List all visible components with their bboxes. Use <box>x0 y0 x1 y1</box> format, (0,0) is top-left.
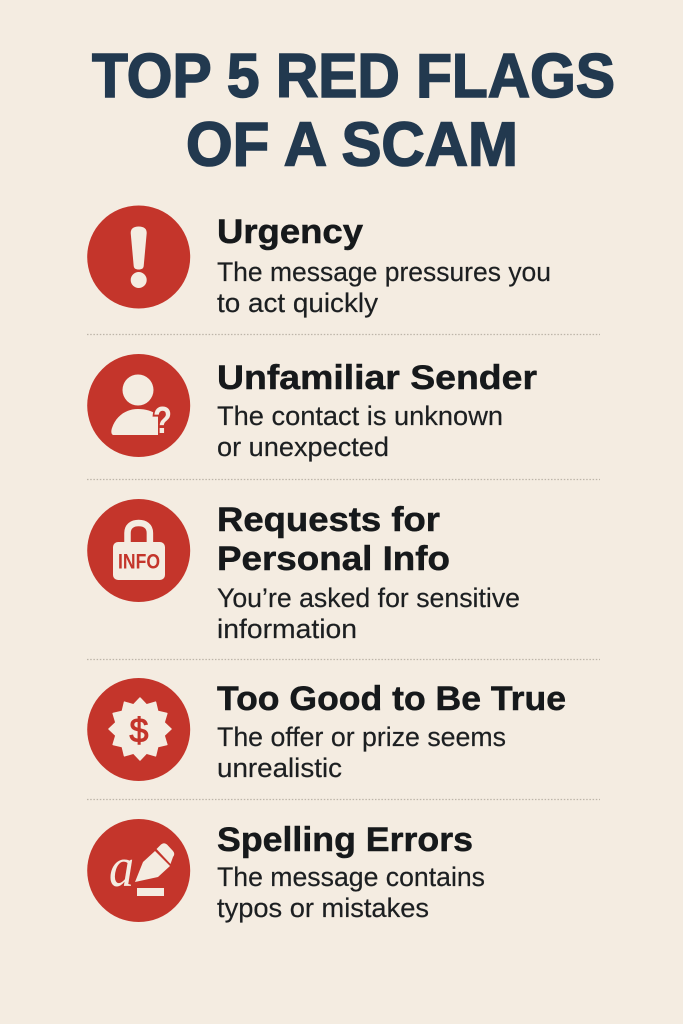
icon: person with question mark <box>87 354 190 457</box>
text: too good to be true: The offer or prize seems <box>217 722 506 752</box>
item: spelling errors <box>87 819 485 923</box>
title: TOP 5 RED FLAGS <box>92 42 615 111</box>
text: too good to be true <box>217 680 566 783</box>
icon: person with question mark: ? <box>153 400 172 442</box>
text: urgency <box>217 213 551 318</box>
icon: letter a with pencil: a <box>109 837 134 899</box>
text: requests for personal info: Personal Info <box>217 540 450 578</box>
icon: padlock labelled info: INFO <box>118 550 160 574</box>
text: spelling errors: typos or mistakes <box>217 893 429 923</box>
text: too good to be true: unrealistic <box>217 753 342 783</box>
icon: letter a with pencil <box>87 819 190 922</box>
item: requests for personal info <box>87 499 520 644</box>
title <box>92 42 615 180</box>
item: too good to be true <box>87 678 566 783</box>
text: unfamiliar sender: or unexpected <box>217 432 389 462</box>
title: OF A SCAM <box>186 110 518 180</box>
text: requests for personal info: Requests for <box>217 501 440 539</box>
text: spelling errors <box>217 821 485 923</box>
item: unfamiliar sender <box>87 354 537 462</box>
text: urgency: to act quickly <box>217 288 379 318</box>
text: requests for personal info <box>217 501 520 644</box>
text: urgency: Urgency <box>217 213 363 251</box>
text: spelling errors: The message contains <box>217 862 485 892</box>
icon: dollar badge: $ <box>130 712 149 750</box>
text: requests for personal info: information <box>217 614 357 644</box>
text: urgency: The message pressures you <box>217 257 551 287</box>
text: unfamiliar sender: The contact is unknown <box>217 401 503 431</box>
text: spelling errors: Spelling Errors <box>217 821 473 859</box>
icon: exclamation mark <box>87 206 190 308</box>
icon: padlock labelled info <box>87 499 190 602</box>
text: unfamiliar sender: Unfamiliar Sender <box>217 359 537 397</box>
text: requests for personal info: You’re asked for sensitive <box>217 583 520 613</box>
icon: dollar badge <box>87 678 190 781</box>
item: urgency <box>87 206 551 318</box>
text: unfamiliar sender <box>217 359 537 462</box>
text: too good to be true: Too Good to Be True <box>217 680 566 718</box>
